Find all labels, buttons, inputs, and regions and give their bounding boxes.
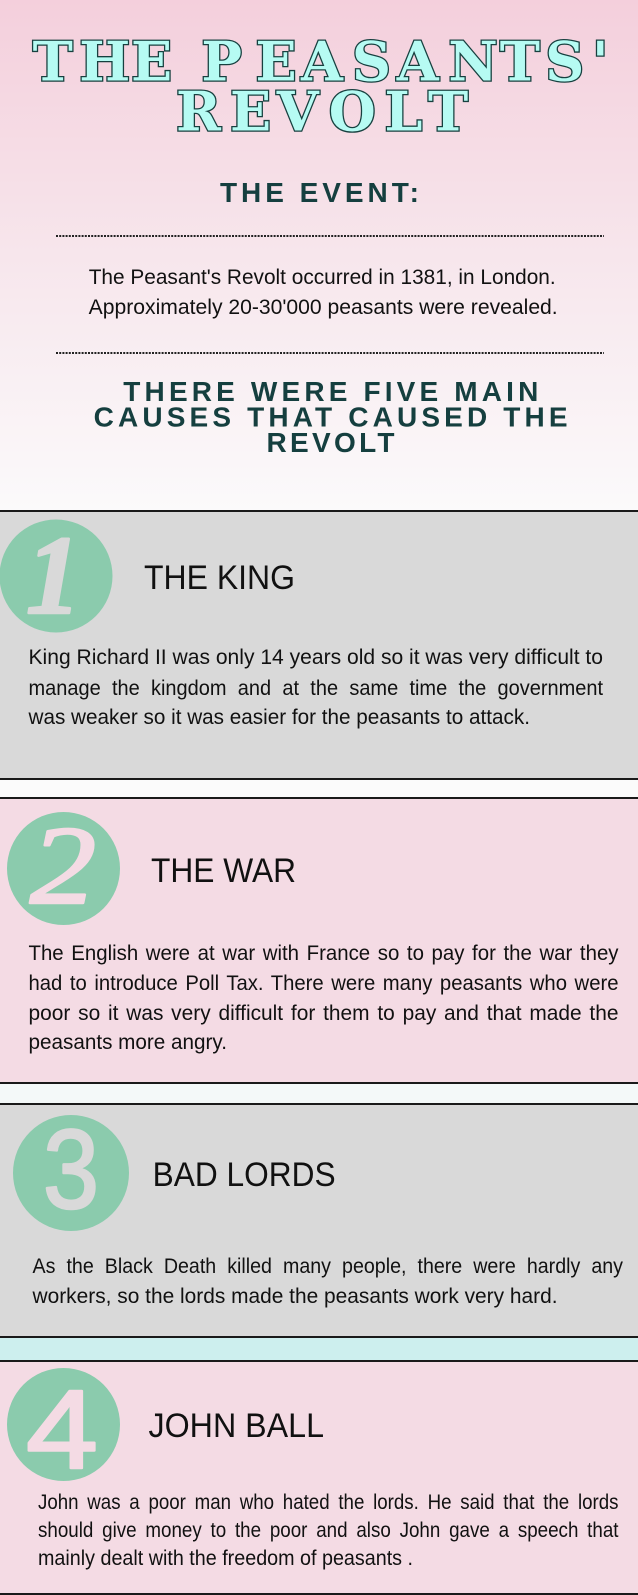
gap strip	[0, 780, 638, 798]
number badge 4: 4	[26, 1367, 98, 1492]
heading: bad lords: BAD LORDS	[153, 1156, 336, 1194]
header panel	[0, 0, 638, 511]
heading: five main causes: THERE WERE FIVE MAIN	[123, 376, 538, 407]
heading: the event: THE EVENT:	[220, 177, 419, 208]
heading: five main causes	[94, 376, 568, 458]
panel: the king	[0, 511, 638, 779]
event description: The Peasant's Revolt occurred in 1381, in London.	[89, 266, 556, 289]
number badge 4	[7, 1367, 120, 1492]
title: REVOLT	[176, 80, 468, 144]
event description: Approximately 20-30'000 peasants were revealed.	[89, 296, 558, 319]
heading: the king: THE KING	[144, 559, 295, 597]
number badge 3: 3	[43, 1107, 99, 1232]
text: the king: manage the kingdom and at the same time the government	[28, 677, 603, 700]
title	[33, 30, 609, 144]
text: the king: King Richard II was only 14 years old so it was very difficult to	[28, 646, 603, 669]
text: the king	[28, 646, 603, 729]
text: bad lords: workers, so the lords made the peasants work very hard.	[32, 1285, 558, 1308]
text: john ball: mainly dealt with the freedom of peasants .	[38, 1547, 413, 1570]
text: john ball	[38, 1491, 619, 1570]
divider top	[56, 235, 604, 237]
number badge 1	[0, 514, 112, 638]
number badge 1: 1	[26, 514, 81, 638]
heading: the war: THE WAR	[151, 852, 296, 890]
number badge 2	[7, 804, 120, 928]
gap strip	[0, 1338, 638, 1361]
divider bottom	[56, 352, 604, 354]
gap strip	[0, 1084, 638, 1104]
text: the king: was weaker so it was easier for the peasants to attack.	[28, 706, 530, 729]
heading: five main causes: CAUSES THAT CAUSED THE	[94, 402, 568, 433]
number badge 3	[13, 1107, 129, 1232]
text: the war: poor so it was very difficult for them to pay and that made the	[28, 1002, 618, 1025]
title: THE PEASANTS'	[33, 30, 609, 94]
panel: john ball	[0, 1361, 638, 1594]
panel: the war	[0, 798, 638, 1083]
event description	[89, 266, 558, 319]
text: the war: The English were at war with France so to pay for the war they	[28, 942, 619, 965]
number badge 2: 2	[30, 804, 96, 928]
panel: bad lords	[0, 1104, 638, 1337]
text: bad lords	[32, 1255, 623, 1308]
heading: john ball: JOHN BALL	[148, 1407, 324, 1445]
text: the war: had to introduce Poll Tax. There were many peasants who were	[28, 972, 618, 995]
text: the war: peasants more angry.	[28, 1031, 227, 1054]
text: the war	[28, 942, 619, 1054]
heading: five main causes: REVOLT	[266, 427, 394, 458]
